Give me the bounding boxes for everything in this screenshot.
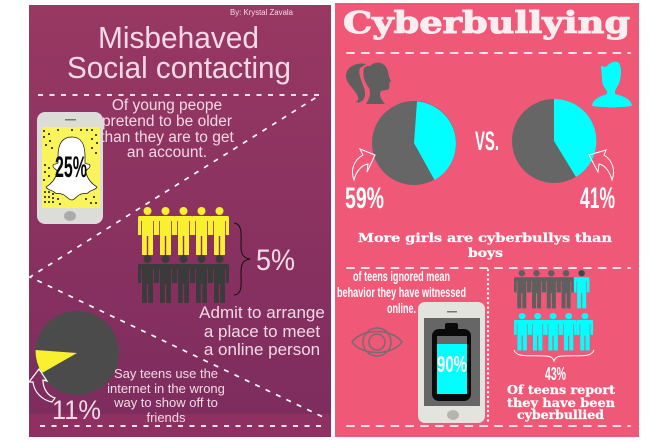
pie chart: girls 59% [372, 101, 456, 185]
pictogram: dark people [138, 255, 229, 303]
stat: 5%: 5% [256, 244, 295, 277]
text: ignored mean behavior: behavior they have witnessed [337, 284, 466, 300]
text: ignored mean behavior [337, 268, 466, 316]
title [67, 20, 291, 85]
icon: phone with battery 90% [418, 302, 485, 423]
brace [234, 223, 250, 295]
byline: By: Krystal Zavala [230, 8, 294, 17]
text: report cyberbullied: Of teens report [507, 383, 615, 397]
text: arrange a place: a online person [204, 340, 320, 359]
pie chart: boys 41% [512, 99, 596, 183]
dashed dividers [347, 53, 630, 426]
arrow: boys [589, 150, 614, 180]
icon: phone with snapcode 25% [37, 112, 103, 224]
text: show off to friends [107, 366, 225, 425]
icon: girl head [346, 63, 391, 104]
text: report cyberbullied: cyberbullied [517, 408, 605, 422]
title: Misbehaved [98, 20, 259, 55]
arrow: girls [352, 149, 375, 180]
panel: cyberbullying [335, 3, 639, 437]
text: pretend to be older: pretend to be older [102, 113, 232, 130]
text: report cyberbullied: they have been [507, 396, 615, 410]
title: Cyberbullying [343, 6, 630, 41]
pictogram: yellow people [138, 207, 229, 255]
text: show off to friends: internet in the wrong [107, 381, 225, 396]
text: more girls: boys [468, 246, 503, 260]
icon: phone with battery 90%: 90% [437, 351, 467, 377]
stat: 59%: 59% [345, 182, 384, 215]
stat: 11%: 11% [52, 395, 101, 425]
brace [514, 350, 594, 361]
text: ignored mean behavior: of teens ignored mean [353, 268, 450, 284]
panel: misbehaved social contacting [29, 5, 331, 437]
icon: phone with snapcode 25%: 25% [55, 151, 87, 184]
icon: eye [352, 328, 402, 356]
dotted divider [487, 270, 489, 425]
stat: 43%: 43% [545, 364, 566, 384]
text: more girls [358, 231, 612, 260]
title: Social contacting [67, 50, 291, 85]
text: arrange a place: a place to meet [204, 322, 320, 341]
text: show off to friends: friends [146, 410, 186, 425]
text: pretend to be older: than they are to get [100, 129, 234, 146]
text: pretend to be older [100, 97, 234, 161]
arrow: 11% [29, 369, 55, 402]
dashed dividers [30, 95, 323, 426]
text: pretend to be older: an account. [127, 144, 207, 161]
text: more girls: More girls are cyberbullys than [358, 231, 612, 245]
pictogram: top row people [514, 270, 589, 308]
text: pretend to be older: Of young peope [112, 97, 222, 114]
text: arrange a place: Admit to arrange [199, 303, 325, 322]
text: report cyberbullied [507, 383, 615, 422]
icon: boy head [592, 62, 632, 108]
text: show off to friends: Say teens use the [114, 366, 218, 381]
pie chart: 11% [35, 311, 119, 395]
text: ignored mean behavior: online. [387, 300, 416, 316]
pictogram: bottom row people [514, 313, 593, 350]
stat: 41%: 41% [580, 182, 615, 215]
text: show off to friends: way to show off to [113, 395, 218, 410]
text: arrange a place [199, 303, 325, 359]
text: vs: VS. [475, 126, 499, 156]
